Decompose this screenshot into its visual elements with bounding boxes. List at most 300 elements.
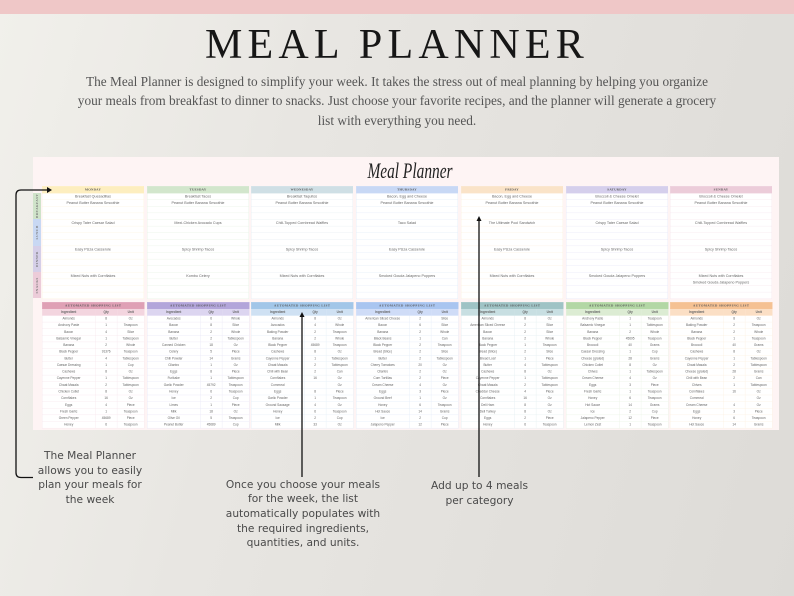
shopping list: Saturday: 12 — [628, 416, 631, 420]
intro text block: list with everything you need. — [318, 113, 476, 128]
shopping list: Wednesday: Teaspoon — [333, 343, 347, 347]
shopping list: Thursday: 2 — [419, 376, 421, 380]
shopping list: Wednesday: 33 — [314, 423, 317, 426]
meal column: Saturday: Broccoli & Cheese Omelet — [595, 194, 638, 198]
shopping list: Wednesday: 2 — [315, 337, 316, 340]
shopping list: Wednesday: Oz — [338, 383, 342, 387]
shopping list: Tuesday: AUTOMATED SHOPPING LIST — [170, 304, 226, 307]
shopping list: Sunday: Oz — [757, 317, 761, 320]
shopping list: Friday: 6 — [524, 423, 526, 426]
meal column: Friday: Peanut Butter Banana Smoothie — [485, 201, 538, 205]
shopping list: Sunday: Cayenne Pepper — [685, 357, 709, 360]
shopping list: Tuesday: Piece — [231, 370, 239, 373]
callout: automatic shopping list: for the week, the list — [248, 492, 358, 505]
shopping list: Monday: Balsamic Vinegar — [56, 337, 81, 340]
shopping list: Tuesday: Eggs — [170, 370, 177, 373]
shopping list: Wednesday: Teaspoon — [333, 330, 347, 334]
shopping list: Tuesday: Teaspoon — [228, 416, 242, 420]
meal column: Monday: Easy Pizza Casserole — [75, 247, 111, 251]
shopping list: Sunday: Black Pepper — [687, 337, 706, 340]
shopping list: Friday: Tablespoon — [541, 363, 558, 367]
shopping list: Friday: AUTOMATED SHOPPING LIST — [484, 304, 540, 307]
shopping list: Wednesday: 1 — [315, 396, 316, 400]
shopping list: Monday: 6 — [105, 423, 107, 426]
shopping list: Thursday: Ice — [381, 416, 385, 420]
meal column: Saturday: Smoked Gouda Jalapeno Poppers — [588, 274, 645, 278]
shopping list: Sunday: Honey — [692, 416, 701, 420]
shopping list: Sunday: Eggs — [693, 410, 700, 413]
shopping list: Thursday: Grams — [440, 410, 450, 413]
shopping list: Friday: Unit — [546, 310, 553, 314]
shopping list: Friday: Butter — [483, 363, 492, 367]
shopping list: Sunday: Qty — [732, 310, 737, 314]
shopping list: Tuesday: 1 — [210, 403, 212, 407]
shopping list: Thursday: 2 — [419, 357, 421, 360]
shopping list: Thursday: Black Beans — [374, 337, 392, 340]
shopping list: Monday: Fresh Garlic — [60, 410, 77, 413]
meal column: Saturday: Spicy Shrimp Tacos — [600, 247, 633, 251]
shopping list: Wednesday: Chaat Masala — [268, 363, 288, 367]
shopping list: Friday: Piece — [545, 416, 553, 420]
callout: automatic shopping list: quantities, and units. — [247, 536, 359, 549]
shopping list: Thursday: Cream Cheese — [372, 383, 393, 387]
shopping list: Tuesday: Limes — [169, 403, 178, 407]
shopping list: Friday: 4 — [524, 363, 526, 367]
shopping list: Tuesday: 6 — [210, 390, 212, 393]
panel: meal planner spreadsheet — [33, 157, 779, 430]
meal column: Wednesday: Peanut Butter Banana Smoothie — [276, 201, 329, 205]
shopping list: Saturday: Black Pepper — [583, 337, 602, 340]
shopping list: Tuesday: 8 — [210, 370, 212, 373]
shopping list: Saturday: Tablespoon — [646, 370, 662, 373]
shopping list: Thursday: 12 — [418, 423, 422, 426]
shopping list: Wednesday: Unit — [337, 310, 343, 314]
shopping list: Sunday: 40 — [733, 343, 736, 347]
meal column: Tuesday: Mexi-Chicken Avocado Cups — [174, 221, 221, 225]
shopping list: Tuesday: Olive Oil — [167, 416, 179, 420]
shopping list: Sunday: 28 — [733, 370, 736, 373]
shopping list: Saturday: Anchovy Paste — [582, 317, 603, 320]
shopping list: Monday: Anchovy Paste — [58, 323, 79, 327]
shopping list: Thursday: 6 — [419, 403, 421, 407]
shopping list: Monday: 91376 — [102, 350, 111, 354]
shopping list: Thursday: 2 — [419, 330, 421, 334]
shopping list: Sunday: Whole — [754, 330, 763, 334]
side label: dinner — [33, 246, 41, 272]
meal column: Saturday — [566, 186, 667, 299]
shopping list: Monday: 8 — [105, 317, 107, 320]
shopping list: Monday: Cashews — [62, 370, 75, 373]
shopping list: Tuesday: Teaspoon — [228, 383, 242, 387]
shopping list: Monday: AUTOMATED SHOPPING LIST — [65, 304, 121, 307]
meal column: Sunday: Chili-Topped Cornbread Waffles — [695, 221, 747, 225]
shopping list: Tuesday: Oz — [233, 363, 237, 367]
shopping list: Wednesday: Whole — [336, 323, 345, 327]
shopping list: Saturday: Teaspoon — [647, 317, 661, 320]
shopping list: Saturday: Oz — [652, 363, 656, 367]
meal column: Wednesday — [251, 186, 353, 299]
meal column: Thursday: THURSDAY — [397, 188, 417, 191]
shopping list: Wednesday: Cup — [337, 416, 343, 420]
shopping list: Tuesday: Furikake — [167, 376, 179, 380]
shopping list: Saturday: 45695 — [625, 337, 634, 340]
shopping list: Tuesday: Butter — [169, 337, 178, 340]
shopping list: Sunday: Chili with Bean — [686, 376, 707, 380]
shopping list: Tuesday: Avocados — [166, 317, 180, 320]
shopping list: Saturday: 2 — [629, 330, 631, 334]
side label: dinner: DINNER — [35, 251, 39, 266]
shopping list: Thursday: American Sliced Cheese — [365, 317, 400, 320]
shopping list: Monday: 45689 — [102, 416, 111, 420]
intro text block — [78, 74, 716, 128]
shopping list: Wednesday: Cornflakes — [270, 376, 286, 380]
shopping list: Thursday: 6 — [419, 323, 421, 327]
callout: automatic shopping list: automatically populates with — [226, 507, 380, 520]
meal column: Thursday: Easy Pizza Casserole — [389, 247, 425, 251]
shopping list: Monday: 1 — [105, 410, 107, 413]
shopping list: Friday: Honey — [483, 423, 492, 426]
meal column: Wednesday: Spicy Shrimp Tacos — [286, 247, 319, 251]
shopping list: Friday: Banana — [482, 337, 493, 340]
shopping list: Sunday: 2 — [733, 363, 735, 367]
shopping list: Wednesday: 2 — [315, 370, 316, 373]
shopping list: Sunday: Baking Powder — [686, 323, 708, 327]
meal column: Sunday: Mixed Nuts with Cornflakes — [699, 274, 744, 278]
shopping list: Saturday: Whole — [650, 330, 659, 334]
shopping list: Friday: Slice — [546, 323, 553, 327]
shopping list: Thursday: 2 — [419, 317, 421, 320]
shopping list: Tuesday: 5 — [210, 416, 212, 420]
shopping list: Friday: 2 — [524, 330, 526, 334]
meal column: Friday — [461, 186, 563, 299]
shopping list: Tuesday: Honey — [169, 390, 178, 393]
shopping list: Saturday: 1 — [629, 323, 631, 327]
shopping list: Friday: Bacon — [483, 330, 492, 334]
meal column: Wednesday: Breakfast Taquitos — [287, 194, 318, 198]
shopping list: Friday: Cashews — [481, 370, 494, 373]
shopping list: Saturday: Teaspoon — [647, 396, 661, 400]
meal column: Thursday: Smoked Gouda Jalapeno Poppers — [379, 274, 435, 278]
shopping list: Friday: Black Pepper — [478, 343, 497, 347]
shopping list: Monday: 8 — [105, 370, 107, 373]
meal column: Tuesday: TUESDAY — [189, 188, 206, 191]
arrow: shopping list callout — [300, 312, 304, 477]
meal column: Monday — [42, 186, 144, 299]
shopping list: Wednesday: Oz — [338, 317, 342, 320]
shopping list: Friday: Cheddar Cheese — [475, 390, 500, 393]
shopping list: Sunday: 1 — [733, 357, 735, 360]
meal column: Wednesday: Chili-Topped Cornbread Waffles — [276, 221, 328, 225]
callout: automatic shopping list — [226, 478, 380, 549]
shopping list: Wednesday: Tablespoon — [332, 357, 348, 360]
shopping list: Wednesday: Cornmeal — [271, 383, 285, 387]
shopping list: Thursday: Slice — [441, 317, 448, 320]
shopping list: Wednesday: AUTOMATED SHOPPING LIST — [274, 304, 331, 307]
meal column: Sunday: Broccoli & Cheese Omelet — [700, 194, 743, 198]
shopping list: Saturday: 1 — [629, 317, 631, 320]
shopping list: Thursday: 4 — [419, 383, 421, 387]
callout: planning meals: allows you to easily — [38, 464, 142, 477]
shopping list: Monday: Green Pepper — [59, 416, 79, 420]
shopping list: Thursday: Honey — [378, 403, 387, 407]
shopping list: Tuesday: 45792 — [206, 383, 215, 387]
shopping list: Thursday: Eggs — [379, 390, 386, 393]
shopping list: Saturday: Lemon Zest — [584, 423, 601, 426]
meal column: Monday: MONDAY — [85, 188, 101, 191]
shopping list: Friday: 2 — [524, 416, 526, 420]
shopping list: Monday: Tablespoon — [123, 357, 139, 360]
shopping list: Sunday: Banana — [691, 330, 702, 334]
shopping list: Saturday: Honey — [588, 396, 597, 400]
shopping list: Friday: Teaspoon — [543, 343, 556, 347]
shopping list: Thursday: Cilantro — [377, 370, 388, 373]
shopping list: Saturday: Grams — [649, 403, 659, 407]
shopping list: Thursday: Unit — [442, 310, 448, 314]
shopping list: Thursday — [356, 302, 459, 428]
meal column: Thursday: Taco Salad — [398, 221, 416, 225]
shopping list: Thursday: Bacon — [378, 323, 387, 327]
intro text block: your meals from breakfast to dinner to snacks. Just choose your favorite recipes, and the planner will generate a grocery — [78, 93, 716, 108]
shopping list: Wednesday: Oz — [338, 423, 342, 426]
shopping list: Wednesday: 8 — [315, 350, 316, 354]
shopping list: Wednesday: Tablespoon — [332, 363, 348, 367]
shopping list: Sunday — [670, 302, 773, 428]
shopping list: Monday: 16 — [104, 396, 108, 400]
shopping list: Saturday: Teaspoon — [647, 423, 661, 426]
meal column: Tuesday: Kombu Celery — [186, 274, 209, 278]
shopping list: Wednesday: 2 — [315, 416, 316, 420]
shopping list: Wednesday: 8 — [315, 390, 316, 393]
callout: meal limit: Add up to 4 meals — [431, 479, 528, 492]
side label: breakfast: BREAKFAST — [35, 194, 39, 218]
shopping list: Monday: Chaat Masala — [59, 383, 78, 387]
side label: snacks — [33, 272, 41, 298]
shopping list: Wednesday: Oz — [338, 376, 342, 380]
shopping list: Tuesday — [147, 302, 249, 428]
shopping list: Friday: Whole — [545, 337, 554, 340]
shopping list: Wednesday: Cayenne Pepper — [266, 357, 290, 360]
shopping list: Friday: Chaat Masala — [478, 383, 497, 387]
shopping list: Saturday: Teaspoon — [647, 390, 661, 393]
shopping list: Wednesday: Whole — [336, 337, 345, 340]
meal column: Thursday: Peanut Butter Banana Smoothie — [381, 201, 434, 205]
shopping list: Friday: 2 — [524, 323, 526, 327]
shopping list: Monday: Qty — [103, 310, 109, 314]
shopping list: Friday: 1 — [524, 376, 526, 380]
meal column: Wednesday: Mixed Nuts with Cornflakes — [280, 274, 325, 278]
shopping list: Tuesday: Ice — [171, 396, 175, 400]
shopping list: Wednesday: Oz — [338, 350, 342, 354]
shopping list: Monday: 4 — [105, 357, 107, 360]
meal column: Monday: Peanut Butter Banana Smoothie — [67, 201, 119, 205]
shopping list: Friday: 8 — [524, 317, 526, 320]
shopping list: Thursday: Ingredient — [375, 310, 390, 314]
shopping list: Tuesday: Cup — [232, 423, 238, 426]
shopping list: Saturday: Piece — [650, 416, 658, 420]
shopping list: Friday: 2 — [524, 350, 526, 354]
shopping list: Friday: 8 — [524, 403, 526, 407]
shopping list: Monday: Black Pepper — [59, 350, 78, 354]
shopping list: Wednesday: 1 — [315, 357, 316, 360]
shopping list: Monday: Bacon — [64, 330, 73, 334]
shopping list: Sunday: AUTOMATED SHOPPING LIST — [693, 304, 750, 307]
shopping list: Tuesday: Chili Powder — [164, 357, 182, 360]
shopping list: Friday: Oz — [547, 396, 552, 400]
shopping list: Tuesday: Whole — [231, 317, 240, 320]
shopping list: Thursday: 2 — [419, 370, 421, 373]
shopping list: Monday: Teaspoon — [124, 410, 138, 413]
shopping list: Monday: Butter — [64, 357, 73, 360]
shopping list: Tuesday: Peanut Butter — [164, 423, 183, 426]
meal column: Tuesday — [147, 186, 249, 299]
meal column: Friday: The Ultimate Pool Sandwich — [489, 221, 535, 225]
shopping list: Tuesday: 2 — [210, 396, 212, 400]
shopping list: Monday: 1 — [105, 376, 107, 380]
shopping list: Wednesday: Ground Sausage — [266, 403, 290, 407]
shopping list: Monday: 4 — [105, 330, 107, 334]
shopping list: Thursday: Oz — [443, 363, 447, 367]
shopping list: Wednesday: Chili with Bean — [268, 370, 289, 373]
shopping list: Saturday: Cup — [651, 410, 657, 413]
shopping list: Friday: Piece — [545, 390, 553, 393]
meal column: Wednesday: WEDNESDAY — [291, 188, 314, 191]
shopping list: Sunday: 16 — [733, 390, 736, 393]
callout: meal limit: per category — [445, 494, 514, 507]
shopping list: Monday: Teaspoon — [124, 350, 138, 354]
shopping list: Wednesday: Ingredient — [270, 310, 286, 314]
meal column: Sunday: Spicy Shrimp Tacos — [705, 247, 737, 251]
shopping list: Thursday: 20 — [418, 363, 422, 367]
shopping list: Monday: Teaspoon — [124, 423, 138, 426]
shopping list: Friday: Deli Turkey — [480, 410, 495, 413]
meal column: Sunday: Smoked Gouda Jalapeno Poppers — [693, 280, 749, 284]
shopping list: Thursday: Qty — [418, 310, 423, 314]
shopping list: Wednesday: 8 — [315, 317, 316, 320]
shopping list: Wednesday: 6 — [315, 410, 316, 413]
shopping list: Monday: 1 — [105, 323, 107, 327]
shopping list: Tuesday: 18 — [209, 410, 213, 413]
shopping list: Monday: 2 — [105, 343, 107, 347]
callout: planning meals: the week — [66, 493, 114, 506]
shopping list: Sunday: 3 — [733, 410, 735, 413]
shopping list: Saturday: Ingredient — [584, 310, 600, 314]
shopping list: Monday: Oz — [129, 396, 133, 400]
shopping list: Wednesday — [251, 302, 354, 428]
shopping list: Monday: Banana — [63, 343, 74, 347]
meal column: Thursday: Bacon, Egg and Cheese — [387, 194, 427, 198]
shopping list: Monday: Teaspoon — [124, 323, 138, 327]
shopping list: Monday — [42, 302, 144, 428]
shopping list: Sunday: Chaat Masala — [687, 363, 707, 367]
shopping list: Sunday: Oz — [757, 403, 761, 407]
shopping list: Saturday: Grams — [649, 343, 659, 347]
callout: automatic shopping list: the required ingredients, — [237, 522, 369, 535]
shopping list: Tuesday: Oz — [233, 410, 237, 413]
shopping list: Sunday: Can — [756, 376, 762, 380]
shopping list: Monday: Unit — [128, 310, 134, 314]
shopping list: Tuesday: Garlic Powder — [163, 383, 183, 387]
meal column: Friday: FRIDAY — [505, 188, 519, 191]
shopping list: Sunday: Tablespoon — [751, 357, 767, 360]
shopping list: Thursday: 1 — [419, 337, 421, 340]
shopping list: Monday: Oz — [129, 390, 133, 393]
shopping list: Sunday: 6 — [733, 416, 735, 420]
side label: lunch — [33, 219, 41, 246]
shopping list: Thursday: Whole — [440, 330, 449, 334]
shopping list: Wednesday: Ice — [276, 416, 280, 420]
shopping list: Sunday: 2 — [733, 330, 735, 334]
shopping list: Sunday: Oz — [757, 396, 761, 400]
shopping list: Tuesday: 1 — [210, 376, 212, 380]
shopping list: Sunday: 2 — [733, 376, 735, 380]
shopping list: Friday: Piece — [545, 357, 553, 360]
shopping list: Thursday: 1 — [419, 396, 421, 400]
shopping list: Thursday: Slice — [441, 323, 448, 327]
shopping list: Tuesday: Canned Chicken — [162, 343, 185, 347]
shopping list: Friday: Bread (Slice) — [478, 350, 497, 354]
meal column: Tuesday: Spicy Shrimp Tacos — [181, 247, 214, 251]
shopping list: Saturday: 8 — [629, 363, 631, 367]
shopping list: Tuesday: Whole — [231, 330, 240, 334]
shopping list: Thursday: Can — [442, 337, 448, 340]
shopping list: Monday: Tablespoon — [123, 337, 139, 340]
meal column: Monday: Crispy Tater Caesar Salad — [71, 221, 114, 225]
shopping list: Sunday: 14 — [733, 423, 736, 426]
shopping list: Saturday: 6 — [629, 396, 631, 400]
shopping list: Saturday: Cup — [651, 350, 657, 354]
callout: planning meals: plan your meals for — [38, 478, 142, 491]
shopping list: Sunday: 2 — [733, 323, 735, 327]
shopping list: Sunday: Oz — [757, 350, 761, 354]
shopping list: Sunday: Unit — [756, 310, 762, 314]
shopping list: Monday: Oz — [129, 317, 133, 320]
shopping list: Monday: Cayenne Pepper — [57, 376, 81, 380]
shopping list: Thursday: Tablespoon — [437, 357, 453, 360]
side label: lunch: LUNCH — [35, 225, 39, 239]
shopping list: Monday: Slice — [127, 330, 134, 334]
shopping list: Thursday: Teaspoon — [438, 403, 452, 407]
shopping list: Thursday: Oz — [443, 370, 447, 373]
shopping list: Tuesday: 1 — [210, 363, 212, 367]
shopping list: Monday: 1 — [105, 363, 107, 367]
shopping list: Thursday: Teaspoon — [438, 343, 452, 347]
shopping list: Wednesday: Cashews — [272, 350, 285, 354]
shopping list: Saturday: 1 — [629, 350, 631, 354]
shopping list: Thursday: Ground Beef — [374, 396, 392, 400]
shopping list: Sunday: Cornflakes — [689, 390, 704, 393]
shopping list: Friday: Deli Ham — [481, 403, 494, 407]
shopping list: Friday: Bread Loaf — [480, 357, 495, 360]
shopping list: Sunday: Oz — [757, 390, 761, 393]
shopping list: Friday: 16 — [523, 396, 527, 400]
shopping list: Tuesday: 8 — [210, 323, 212, 327]
shopping list: Monday: Ingredient — [61, 310, 76, 314]
shopping list: Tuesday: 14 — [209, 357, 213, 360]
shopping list: Tuesday: Piece — [231, 350, 239, 354]
shopping list: Thursday: 3 — [419, 390, 421, 393]
shopping list: Tuesday: Ingredient — [166, 310, 181, 314]
shopping list: Monday: Piece — [127, 403, 135, 407]
shopping list: Sunday: Teaspoon — [752, 323, 766, 327]
meal column: Saturday: Crispy Tater Caesar Salad — [595, 221, 638, 225]
shopping list: Friday: Teaspoon — [543, 423, 556, 426]
shopping list: Tuesday: Unit — [232, 310, 238, 314]
shopping list: Tuesday: Celery — [169, 350, 178, 354]
shopping list: Sunday: Chives — [692, 383, 702, 387]
shopping list: Wednesday: Teaspoon — [333, 396, 347, 400]
shopping list: Sunday: Broccoli — [691, 343, 703, 347]
shopping list: Wednesday: Garlic Powder — [268, 396, 288, 400]
